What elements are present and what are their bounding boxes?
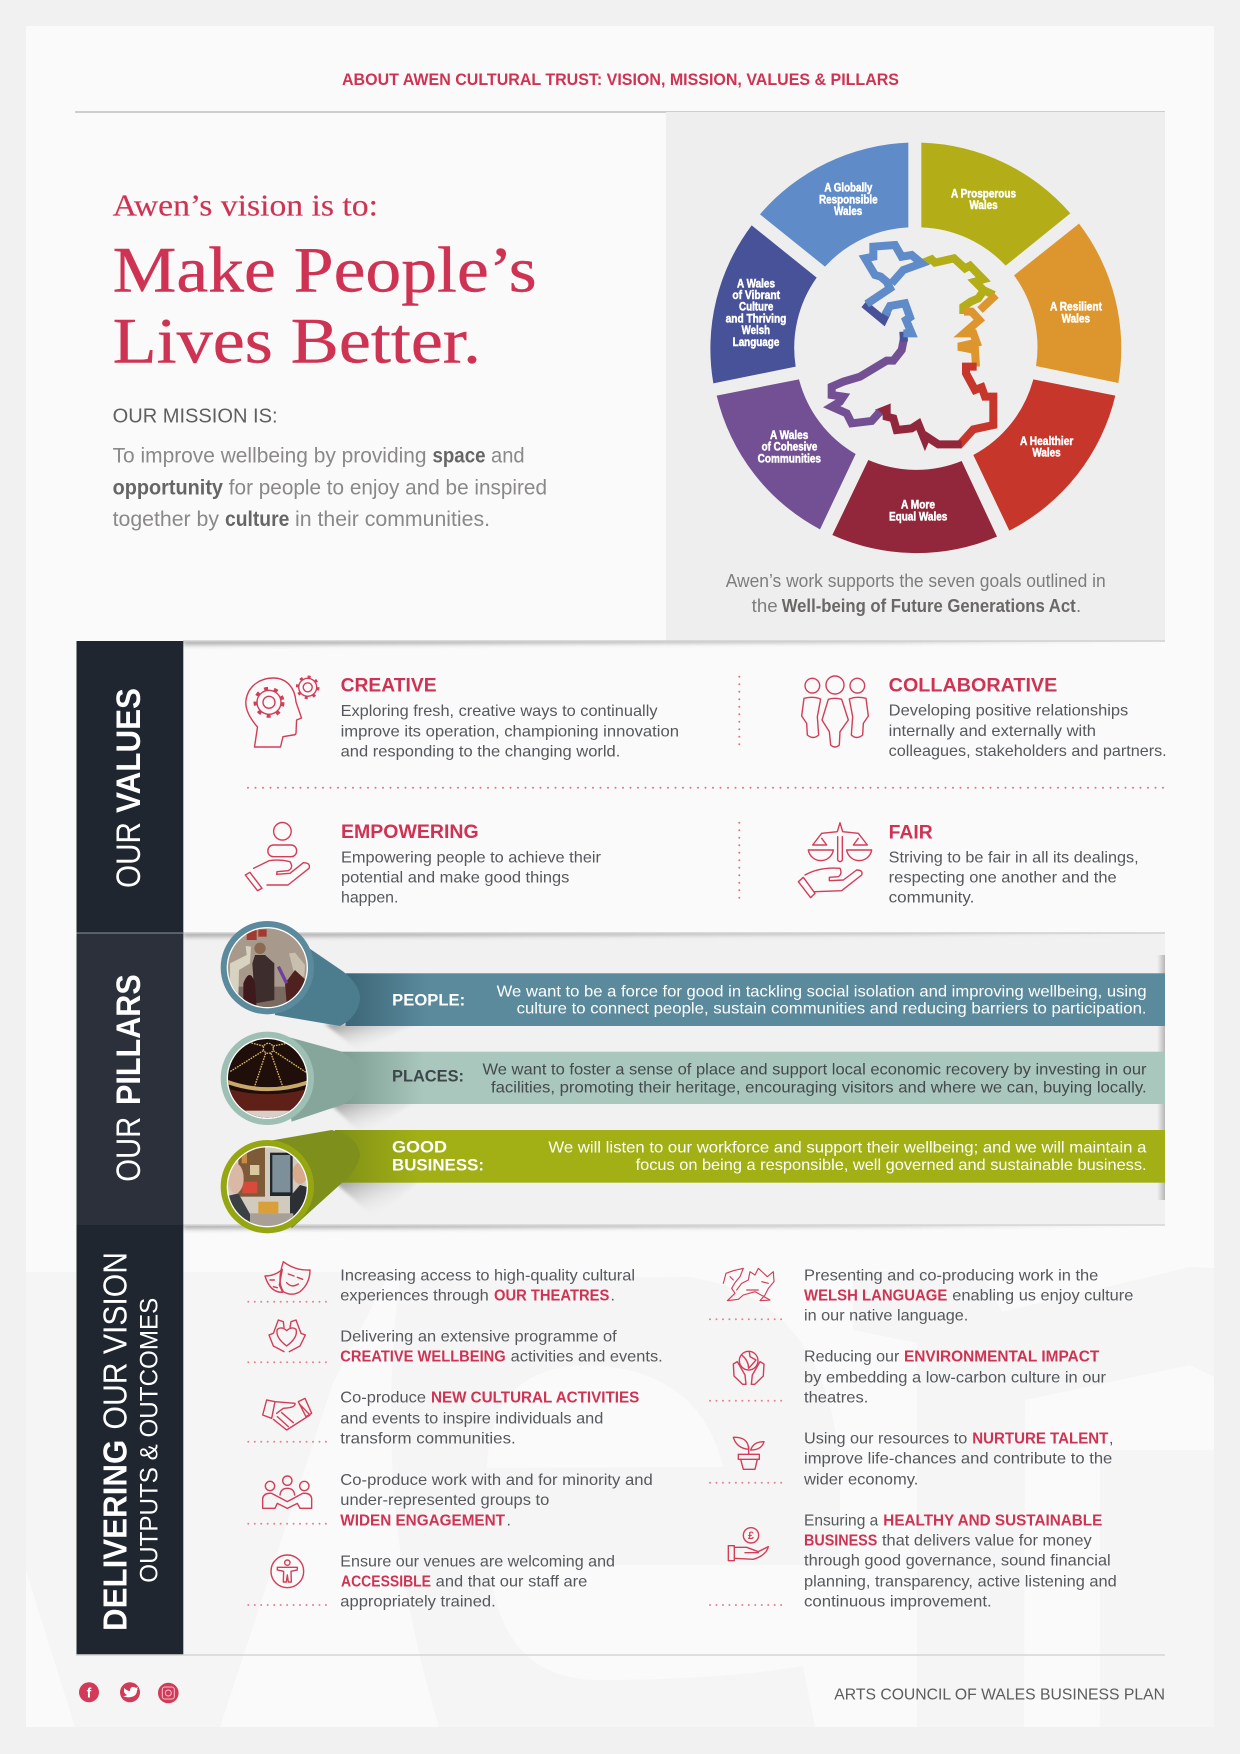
segment: cohesive: A Wales bbox=[770, 429, 808, 442]
segment: more equal bbox=[832, 460, 997, 553]
tube and photo bbox=[221, 1130, 360, 1233]
outcome: widen engagement bbox=[248, 1472, 653, 1529]
delivering side label: DELIVERING bbox=[96, 1440, 134, 1631]
value: collaborative: colleagues, stakeholders and partners. bbox=[889, 743, 1167, 760]
footer text: ARTS COUNCIL OF WALES BUSINESS PLAN bbox=[834, 1687, 1165, 1704]
tube and photo bbox=[220, 1032, 344, 1125]
mission text: in their communities. bbox=[295, 508, 490, 531]
segment: healthier: Wales bbox=[1032, 446, 1061, 459]
vision headline bbox=[113, 235, 537, 378]
shadow bbox=[332, 1180, 420, 1218]
value: fair: respecting one another and the bbox=[889, 869, 1117, 886]
panel: well-being goals bbox=[666, 112, 1165, 641]
outcome: creative wellbeing: activities and events. bbox=[511, 1349, 663, 1366]
segment: resilient bbox=[1014, 224, 1121, 383]
outcome: nurture talent: , bbox=[1109, 1430, 1113, 1447]
outcome: new cultural activities bbox=[248, 1390, 640, 1447]
pillar: people: culture to connect people, sustain communities and reducing barriers to participation. bbox=[517, 1000, 1147, 1017]
mission text: culture bbox=[225, 508, 289, 531]
segment: prosperous: A Prosperous bbox=[951, 187, 1016, 200]
outcome: accessible: appropriately trained. bbox=[340, 1594, 496, 1611]
outcome: nurture talent: Using our resources to bbox=[804, 1430, 967, 1447]
outcome: welsh language: in our native language. bbox=[804, 1308, 968, 1325]
value: collaborative: Developing positive relationships bbox=[889, 703, 1128, 720]
pillars side label: PILLARS bbox=[110, 974, 148, 1105]
icon: handshake bbox=[263, 1398, 312, 1430]
segment: resilient: Wales bbox=[1062, 312, 1090, 325]
good business label bbox=[392, 1139, 484, 1175]
value: collaborative bbox=[802, 676, 1167, 760]
delivering side label: OUR VISION bbox=[96, 1252, 134, 1430]
panel: pillars bbox=[221, 921, 1165, 1233]
outcome: environmental impact: theatres. bbox=[804, 1390, 868, 1407]
value: fair: community. bbox=[889, 889, 974, 906]
outcome: accessible: ACCESSIBLE bbox=[341, 1574, 431, 1591]
outcome: environmental impact: by embedding a low-carbon culture in our bbox=[804, 1370, 1107, 1387]
segment: prosperous: Wales bbox=[969, 199, 998, 212]
segment: vibrant culture: and Thriving bbox=[726, 312, 786, 325]
outcome: theatres: OUR THEATRES bbox=[494, 1288, 610, 1305]
mission heading: OUR MISSION IS: bbox=[113, 406, 278, 428]
panel: values bbox=[245, 676, 1167, 907]
outcome: widen engagement: under-represented groups to bbox=[340, 1492, 549, 1509]
outcome: theatres: Increasing access to high-quality cultural bbox=[340, 1268, 635, 1285]
goals caption: Well-being of Future Generations Act bbox=[782, 595, 1076, 616]
icon: twitter bbox=[120, 1682, 140, 1702]
values side label bbox=[76, 641, 183, 933]
outcome: healthy business: through good governance, sound financial bbox=[804, 1552, 1111, 1569]
segment: globally responsible bbox=[760, 143, 908, 267]
good business label: BUSINESS: bbox=[392, 1157, 484, 1175]
segment: healthier: A Healthier bbox=[1020, 435, 1074, 448]
value: empowering: potential and make good things bbox=[341, 870, 569, 887]
ribbon bbox=[346, 973, 1165, 1026]
value: fair bbox=[798, 822, 1139, 906]
mission text bbox=[113, 445, 547, 531]
pillar: good business: focus on being a responsible, well governed and sustainable business. bbox=[636, 1157, 1147, 1174]
pillar: people: We want to be a force for good in tackling social isolation and improving wellbeing, using bbox=[497, 984, 1147, 1001]
outcome: healthy business: planning, transparency, active listening and bbox=[804, 1574, 1117, 1591]
value: empowering bbox=[245, 822, 602, 907]
outcome: theatres: . bbox=[610, 1288, 615, 1305]
mission text: opportunity bbox=[113, 476, 223, 499]
icon: scales on hand bbox=[798, 823, 872, 898]
segment: healthier bbox=[973, 379, 1115, 531]
good business label: GOOD bbox=[392, 1139, 447, 1157]
value: collaborative: COLLABORATIVE bbox=[889, 676, 1057, 697]
vision block bbox=[113, 188, 547, 531]
value: creative bbox=[246, 676, 679, 761]
icon: masks bbox=[265, 1262, 310, 1294]
social icons bbox=[79, 1682, 179, 1703]
tube and photo bbox=[221, 921, 360, 1026]
outcome: environmental impact: ENVIRONMENTAL IMPACT bbox=[904, 1349, 1100, 1366]
pillar: good business: We will listen to our workforce and support their wellbeing; and we will maintain a bbox=[548, 1139, 1147, 1156]
outcome: accessible: Ensure our venues are welcoming and bbox=[340, 1554, 615, 1571]
segment: vibrant culture: Language bbox=[733, 336, 780, 349]
value: empowering: EMPOWERING bbox=[341, 822, 479, 843]
segment: cohesive: Communities bbox=[758, 452, 821, 465]
pillar: good business bbox=[221, 1130, 1165, 1233]
value: fair: Striving to be fair in all its dealings, bbox=[889, 850, 1139, 867]
outcome: widen engagement: WIDEN ENGAGEMENT bbox=[340, 1512, 505, 1529]
mission text: and bbox=[491, 445, 525, 468]
outcome: welsh language bbox=[710, 1268, 1133, 1325]
outcome: healthy business: that delivers value for money bbox=[882, 1532, 1092, 1549]
outcome: healthy business bbox=[710, 1512, 1117, 1611]
segment: vibrant culture: of Vibrant bbox=[732, 289, 780, 302]
goals caption: Awen’s work supports the seven goals outlined in bbox=[726, 570, 1106, 591]
outcome: healthy business: Ensuring a bbox=[804, 1512, 878, 1529]
vision headline: Lives Better. bbox=[113, 306, 481, 378]
values side label: VALUES bbox=[110, 688, 148, 813]
outcome: widen engagement: Co-produce work with and for minority and bbox=[340, 1472, 653, 1489]
mission text: for people to enjoy and be inspired bbox=[229, 476, 547, 499]
icon: instagram bbox=[158, 1683, 179, 1703]
pillars side label: OUR bbox=[110, 1117, 148, 1182]
segment: vibrant culture: Culture bbox=[739, 301, 774, 314]
value: collaborative: internally and externally with bbox=[889, 723, 1096, 740]
segment: globally responsible: Wales bbox=[834, 205, 862, 218]
icon: coin over hand bbox=[728, 1528, 768, 1561]
icon: facebook: f bbox=[87, 1684, 92, 1700]
outcome: environmental impact bbox=[710, 1349, 1107, 1407]
pillar: places: PLACES: bbox=[392, 1068, 464, 1086]
outcome: welsh language: Presenting and co-producing work in the bbox=[804, 1268, 1098, 1285]
value: creative: improve its operation, championing innovation bbox=[341, 724, 679, 741]
delivering side label bbox=[76, 1225, 183, 1655]
outcome: accessible bbox=[248, 1554, 615, 1611]
section shadows bbox=[183, 639, 1165, 645]
segment: vibrant culture bbox=[710, 225, 817, 383]
icon: head with gears bbox=[246, 677, 318, 747]
icon: accessibility bbox=[271, 1555, 304, 1588]
icon: person on hand bbox=[245, 822, 309, 891]
outcome: nurture talent: improve life-chances and contribute to the bbox=[804, 1450, 1112, 1467]
shadow bbox=[328, 1102, 415, 1134]
goals caption bbox=[726, 570, 1106, 616]
panel: delivering left column bbox=[248, 1262, 663, 1611]
icon: group bbox=[263, 1476, 312, 1508]
segment: cohesive: of Cohesive bbox=[762, 441, 818, 454]
pillar: places: We want to foster a sense of place and support local economic recovery by investing in our bbox=[482, 1061, 1147, 1078]
outcome: theatres: experiences through bbox=[340, 1288, 489, 1305]
segment: vibrant culture: A Wales bbox=[737, 277, 775, 290]
mission text: space bbox=[432, 445, 486, 468]
shadow bbox=[325, 1024, 415, 1050]
segment: vibrant culture: Welsh bbox=[742, 324, 770, 337]
outcome: healthy business: continuous improvement. bbox=[804, 1594, 992, 1611]
icon: coin over hand: £ bbox=[748, 1530, 754, 1542]
value: empowering: happen. bbox=[341, 890, 398, 907]
value: empowering: Empowering people to achieve their bbox=[341, 850, 602, 867]
segment: prosperous bbox=[921, 143, 1070, 266]
icon: plant pot bbox=[733, 1437, 764, 1469]
segment: globally responsible: A Globally bbox=[824, 182, 873, 195]
pillar: places bbox=[221, 1032, 1165, 1134]
goals caption: . bbox=[1076, 595, 1081, 616]
outcome: accessible: and that our staff are bbox=[436, 1574, 587, 1591]
icon: globe in hands bbox=[733, 1351, 764, 1384]
outcome: healthy business: BUSINESS bbox=[804, 1532, 878, 1549]
values side label: OUR bbox=[110, 822, 148, 888]
outcome: new cultural activities: and events to inspire individuals and bbox=[340, 1410, 603, 1427]
pillar: people: PEOPLE: bbox=[392, 992, 465, 1010]
goals caption: the bbox=[752, 595, 778, 616]
delivering side label: OUTPUTS & OUTCOMES bbox=[136, 1298, 164, 1583]
segment: globally responsible: Responsible bbox=[819, 193, 878, 206]
pillars side label bbox=[76, 933, 183, 1225]
outcome: creative wellbeing bbox=[248, 1320, 663, 1366]
outcome: theatres bbox=[248, 1262, 635, 1305]
segment: resilient: A Resilient bbox=[1050, 301, 1102, 314]
vision headline: Make People’s bbox=[113, 235, 537, 307]
watermark letters bbox=[26, 1267, 1214, 1727]
ribbon bbox=[341, 1052, 1165, 1104]
value: creative: and responding to the changing world. bbox=[341, 744, 620, 761]
value: fair: FAIR bbox=[889, 822, 933, 843]
outcome: new cultural activities: Co-produce bbox=[340, 1390, 426, 1407]
segment: cohesive bbox=[717, 379, 856, 529]
panel: delivering right column bbox=[710, 1268, 1133, 1611]
mission text: together by bbox=[113, 508, 219, 531]
outcome: healthy business: HEALTHY AND SUSTAINABLE bbox=[883, 1512, 1103, 1529]
map of Wales bbox=[832, 245, 996, 446]
pillar: places: facilities, promoting their heritage, encouraging visitors and where we can, buying locally. bbox=[491, 1079, 1147, 1096]
value: creative: Exploring fresh, creative ways to continually bbox=[341, 703, 658, 720]
segment: more equal: Equal Wales bbox=[889, 510, 947, 523]
outcome: creative wellbeing: CREATIVE WELLBEING bbox=[340, 1349, 506, 1366]
value: creative: CREATIVE bbox=[341, 676, 437, 697]
outcome: widen engagement: . bbox=[506, 1512, 511, 1529]
outcome: nurture talent: wider economy. bbox=[803, 1471, 918, 1488]
outcome: new cultural activities: transform communities. bbox=[340, 1430, 516, 1447]
pillar: people bbox=[221, 921, 1165, 1050]
outcome: creative wellbeing: Delivering an extensive programme of bbox=[340, 1329, 617, 1346]
mission text: To improve wellbeing by providing bbox=[113, 445, 426, 468]
title: ABOUT AWEN CULTURAL TRUST: VISION, MISSION, VALUES & PILLARS bbox=[342, 71, 899, 89]
vision intro: Awen’s vision is to: bbox=[113, 188, 378, 223]
outcome: nurture talent bbox=[710, 1430, 1113, 1488]
segment: more equal: A More bbox=[901, 499, 935, 512]
outcome: new cultural activities: NEW CULTURAL ACTIVITIES bbox=[431, 1390, 640, 1407]
outcome: nurture talent: NURTURE TALENT bbox=[972, 1430, 1109, 1447]
goals wheel bbox=[710, 143, 1121, 553]
icon: three people bbox=[802, 676, 868, 747]
outcome: environmental impact: Reducing our bbox=[804, 1349, 900, 1366]
icon: heart hands bbox=[269, 1320, 305, 1352]
outcome: welsh language: WELSH LANGUAGE bbox=[804, 1288, 948, 1305]
outcome: welsh language: enabling us enjoy culture bbox=[952, 1288, 1133, 1305]
icon: dragon bbox=[723, 1268, 774, 1301]
ribbon bbox=[335, 1130, 1165, 1183]
